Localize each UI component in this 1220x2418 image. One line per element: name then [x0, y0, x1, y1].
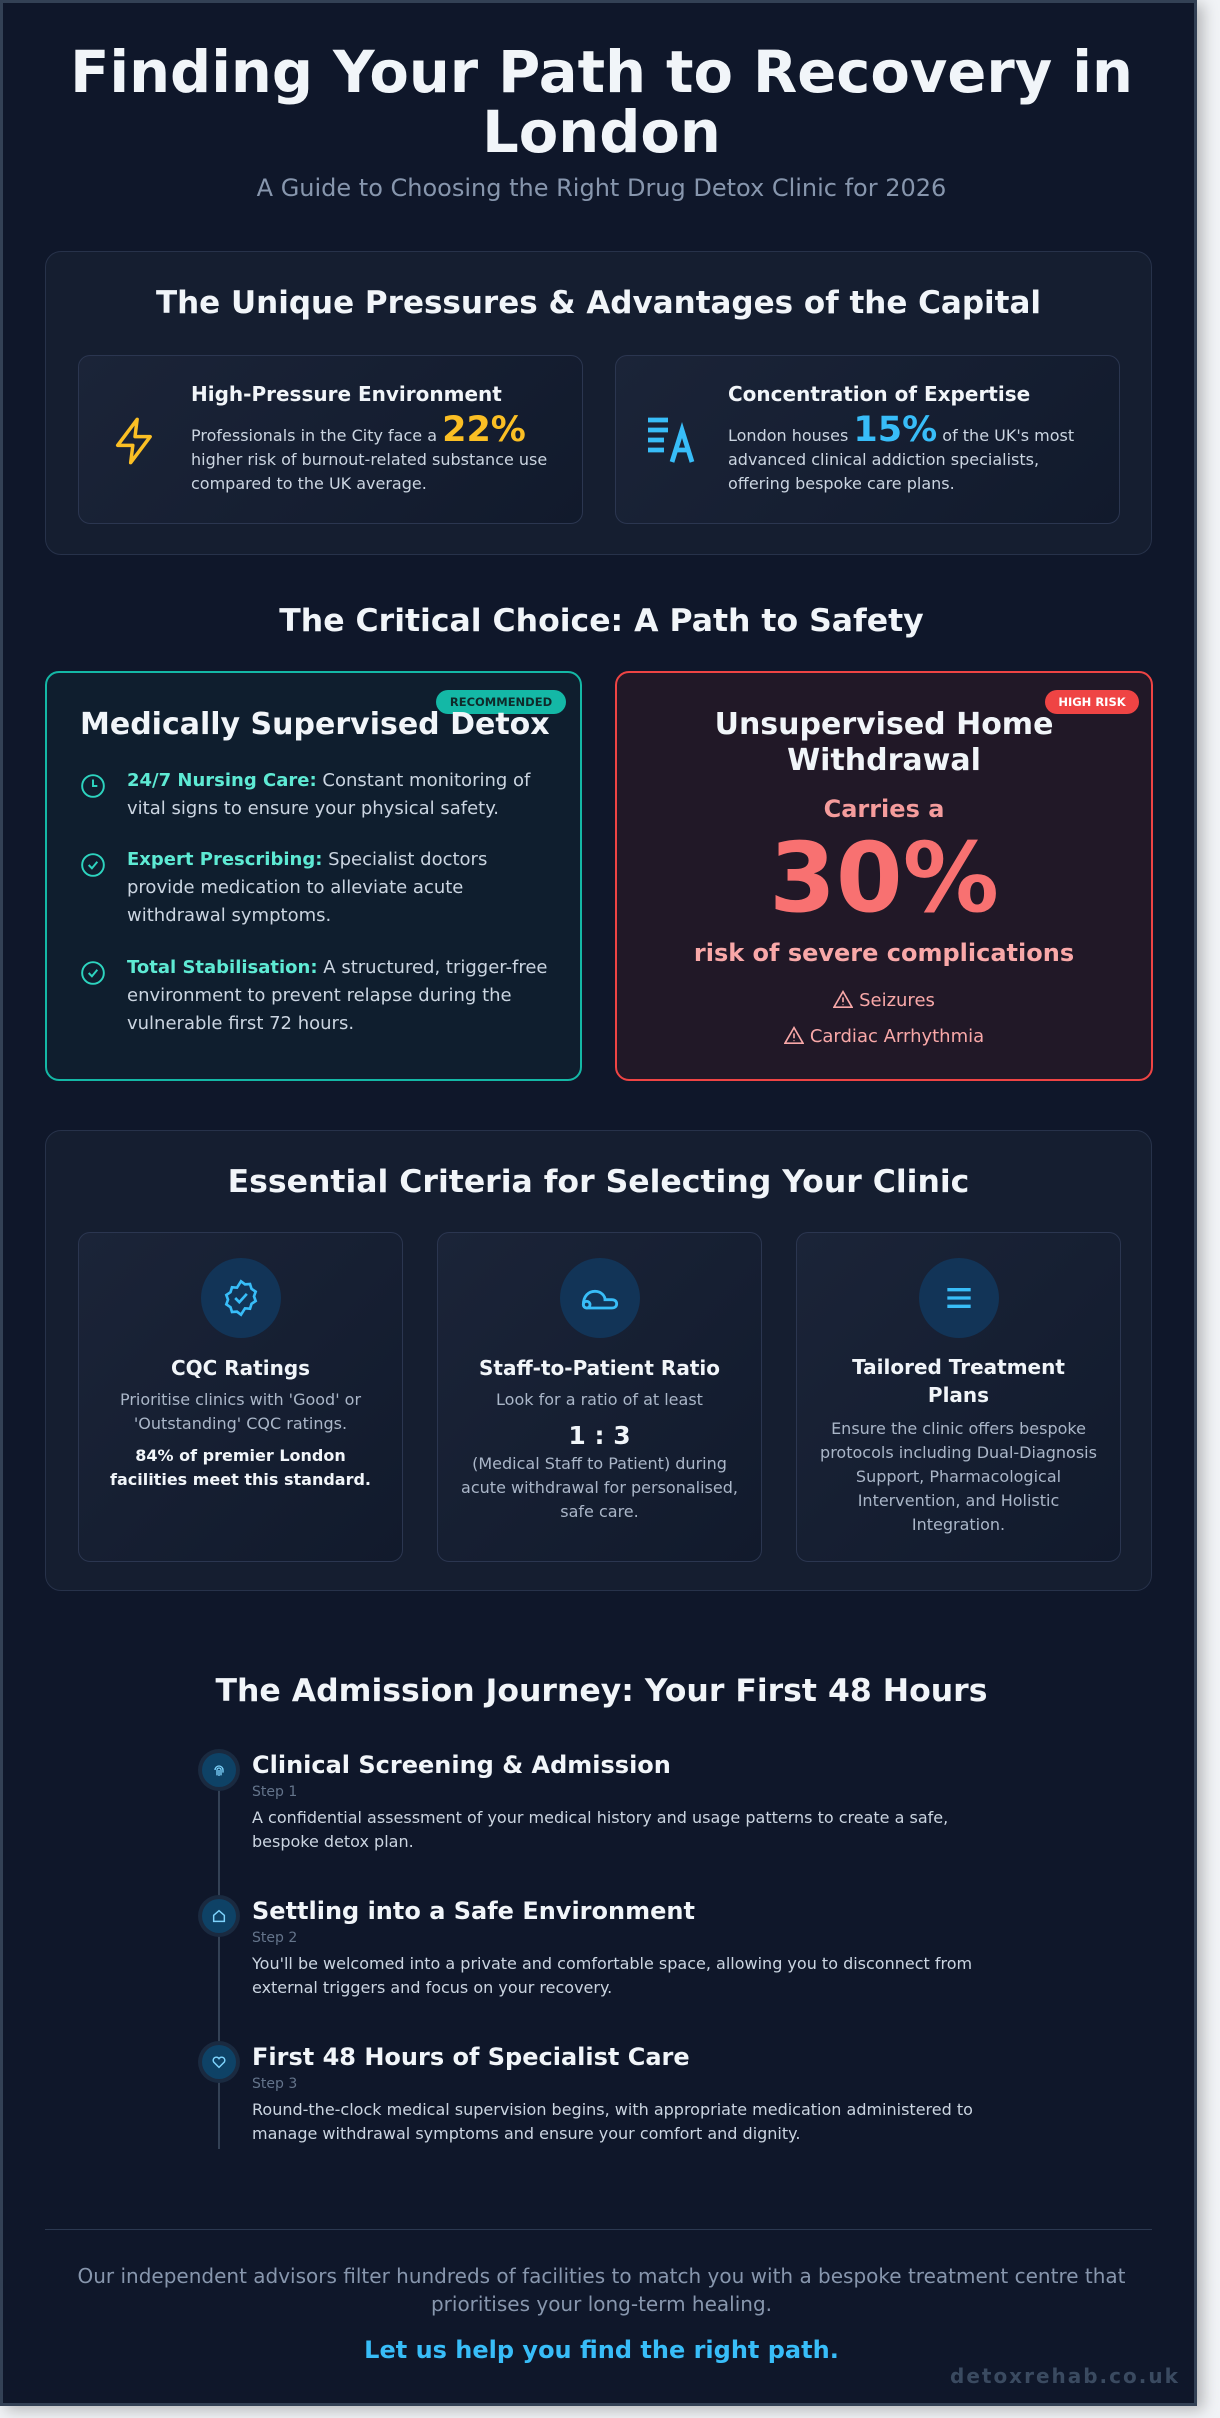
item: prescribing: Expert Prescribing: Specialist doctors provide medication to alleviate acute withdrawal symptoms.	[127, 849, 487, 926]
timeline: Clinical Screening & Admission	[252, 1751, 671, 1779]
step 3	[198, 2041, 973, 2143]
icon: home	[202, 1899, 236, 1933]
icon: expertise	[648, 418, 694, 463]
card: CQC	[78, 1232, 403, 1562]
card: tailored: Ensure the clinic offers bespoke protocols including Dual-Diagnosis Support, Pharmacological Intervention, and Holistic Integration.	[820, 1419, 1097, 1534]
card: tailored	[796, 1232, 1121, 1562]
timeline: Step 3	[252, 2076, 297, 2092]
text: expertise: London houses 15% of the UK's most advanced clinical addiction specialists, offering bespoke care plans.	[728, 410, 1074, 493]
stat: 30%	[694, 795, 1074, 967]
stat: 30%: 30%	[769, 822, 999, 934]
card: tailored: Tailored Treatment Plans	[852, 1355, 1065, 1407]
icon: menu	[919, 1258, 999, 1338]
title: supervised: Medically Supervised Detox	[80, 707, 550, 742]
watermark: detoxrehab.co.uk	[950, 2364, 1180, 2388]
icon: staff	[560, 1258, 640, 1338]
card: CQC: 84% of premier London facilities meet this standard.	[110, 1446, 371, 1489]
badge: high risk	[1045, 690, 1139, 714]
icon: heart	[202, 2045, 236, 2079]
icon: badge check	[201, 1258, 281, 1338]
badge: high risk: HIGH RISK	[1058, 695, 1126, 709]
badge: recommended	[436, 690, 566, 714]
heading: critical choice: The Critical Choice: A Path to Safety	[279, 603, 924, 639]
text: high-pressure: Professionals in the City face a 22% higher risk of burnout-related substance use compared to the UK average.	[191, 410, 547, 493]
card: CQC: CQC Ratings	[171, 1356, 310, 1380]
heading: criteria: Essential Criteria for Selecting Your Clinic	[228, 1164, 969, 1200]
timeline: Settling into a Safe Environment	[252, 1897, 695, 1925]
timeline: Round-the-clock medical supervision begins, with appropriate medication administered to manage withdrawal symptoms and ensure your comfort and dignity.	[252, 2100, 973, 2143]
card: ratio	[437, 1232, 762, 1562]
timeline: Step 1	[252, 1784, 297, 1800]
subtitle: A Guide to Choosing the Right Drug Detox Clinic for 2026	[257, 174, 946, 202]
title: unsupervised	[715, 707, 1053, 778]
title: Finding Your Path to Recovery in London	[70, 39, 1133, 166]
timeline: Step 2	[252, 1930, 297, 1946]
panel: unsupervised withdrawal	[615, 671, 1153, 1081]
timeline: You'll be welcomed into a private and comfortable space, allowing you to disconnect from external triggers and focus on your recovery.	[252, 1954, 972, 1997]
timeline	[198, 1749, 973, 2149]
stat: 30%: risk of severe complications	[694, 939, 1074, 967]
item: nursing: 24/7 Nursing Care: Constant monitoring of vital signs to ensure your physical safety.	[127, 770, 530, 819]
step 1	[198, 1749, 948, 1851]
title: unsupervised: Withdrawal	[787, 743, 981, 778]
heading: pressures: The Unique Pressures & Advantages of the Capital	[156, 285, 1041, 321]
panel: supervised detox	[45, 671, 582, 1081]
item: stabilisation: Total Stabilisation: A structured, trigger-free environment to prevent relapse during the vulnerable first 72 hours.	[127, 957, 548, 1034]
timeline: First 48 Hours of Specialist Care	[252, 2043, 690, 2071]
footer text: Our independent advisors filter hundreds of facilities to match you with a bespoke treatment centre that prioritises your long-term healing.	[77, 2264, 1126, 2316]
list: risks	[784, 990, 984, 1047]
text: high-pressure: High-Pressure Environment	[191, 382, 502, 406]
list: risks: Seizures	[859, 990, 935, 1011]
card: ratio: (Medical Staff to Patient) during acute withdrawal for personalised, safe care.	[461, 1454, 738, 1521]
card: CQC: Prioritise clinics with 'Good' or 'Outstanding' CQC ratings.	[120, 1390, 361, 1433]
text: expertise: Concentration of Expertise	[728, 382, 1030, 406]
panel: pressures & advantages	[45, 251, 1152, 555]
card: expertise	[615, 355, 1120, 524]
icon: fingerprint	[202, 1753, 236, 1787]
call to action: Let us help you find the right path.	[364, 2336, 839, 2364]
stat: 30%: Carries a	[824, 795, 944, 823]
card: ratio: 1 : 3	[568, 1421, 631, 1450]
list: risks: Cardiac Arrhythmia	[810, 1026, 984, 1047]
panel: criteria	[45, 1130, 1152, 1591]
icon: lightning	[116, 418, 152, 464]
card: ratio: Look for a ratio of at least	[496, 1390, 703, 1409]
timeline: A confidential assessment of your medical history and usage patterns to create a safe, bespoke detox plan.	[252, 1808, 948, 1851]
heading: admission journey: The Admission Journey: Your First 48 Hours	[216, 1673, 987, 1709]
card: high-pressure	[78, 355, 583, 524]
step 2	[198, 1895, 972, 1997]
title: unsupervised: Unsupervised Home	[715, 707, 1053, 742]
badge: recommended: RECOMMENDED	[450, 695, 552, 709]
card: ratio: Staff-to-Patient Ratio	[479, 1356, 720, 1380]
